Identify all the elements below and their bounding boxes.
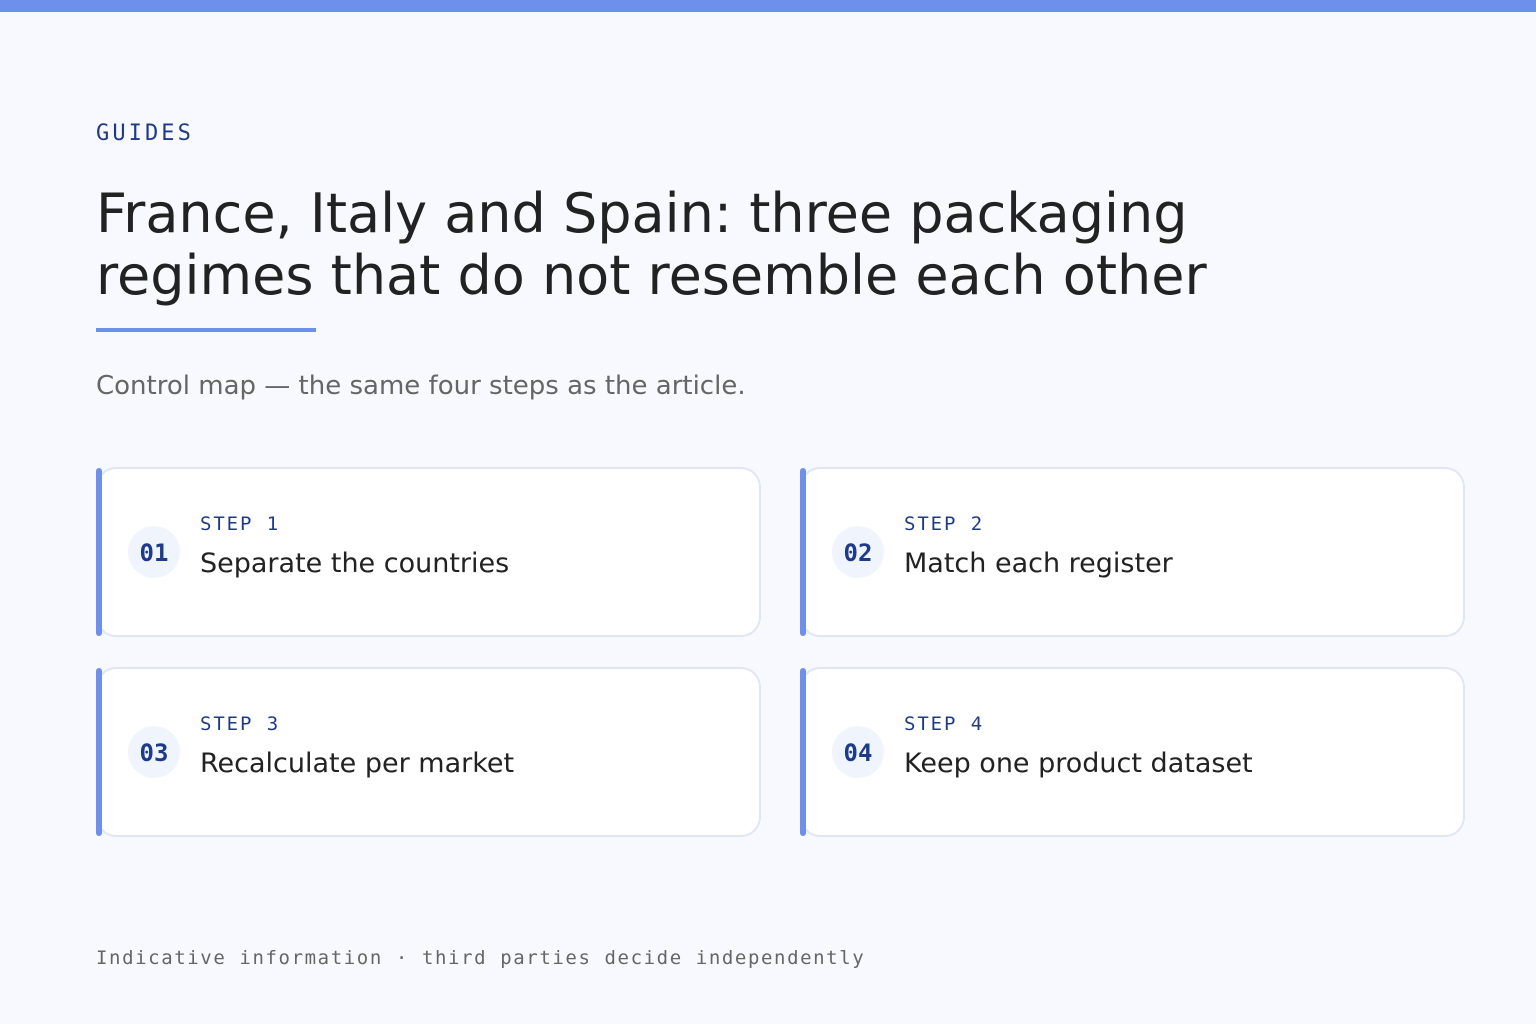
number badge 02: 02 [844, 539, 872, 567]
step title: Match each register [904, 548, 1173, 579]
card background [800, 667, 1465, 837]
card background [96, 467, 761, 637]
footer note: Indicative information · third parties decide independently [96, 947, 865, 969]
step label: STEP 4 [904, 713, 984, 735]
card background [96, 667, 761, 837]
title: regimes that do not resemble each other [96, 244, 1207, 307]
panel: step 1 [96, 467, 761, 637]
panel: step 2 [800, 467, 1465, 637]
accent bar [800, 668, 806, 836]
number badge 04: 04 [844, 739, 872, 767]
number badge 01: 01 [140, 539, 168, 567]
step label: STEP 2 [904, 513, 984, 535]
number badge 02 [832, 526, 884, 578]
number badge 01 [128, 526, 180, 578]
accent bar [800, 468, 806, 636]
number badge 03 [128, 726, 180, 778]
step title: Separate the countries [200, 548, 509, 579]
panel: step 3 [96, 667, 761, 837]
step title: Keep one product dataset [904, 748, 1253, 779]
eyebrow: guides: GUIDES [96, 121, 194, 146]
card background [800, 467, 1465, 637]
step label: STEP 3 [200, 713, 280, 735]
number badge 04 [832, 726, 884, 778]
step title: Recalculate per market [200, 748, 514, 779]
accent bar [96, 668, 102, 836]
step label: STEP 1 [200, 513, 280, 535]
subtitle: Control map — the same four steps as the article. [96, 371, 746, 401]
top accent bar [0, 0, 1536, 12]
title: France, Italy and Spain: three packaging [96, 182, 1187, 245]
title underline [96, 328, 316, 332]
number badge 03: 03 [140, 739, 168, 767]
title [96, 182, 1207, 307]
panel: step 4 [800, 667, 1465, 837]
accent bar [96, 468, 102, 636]
